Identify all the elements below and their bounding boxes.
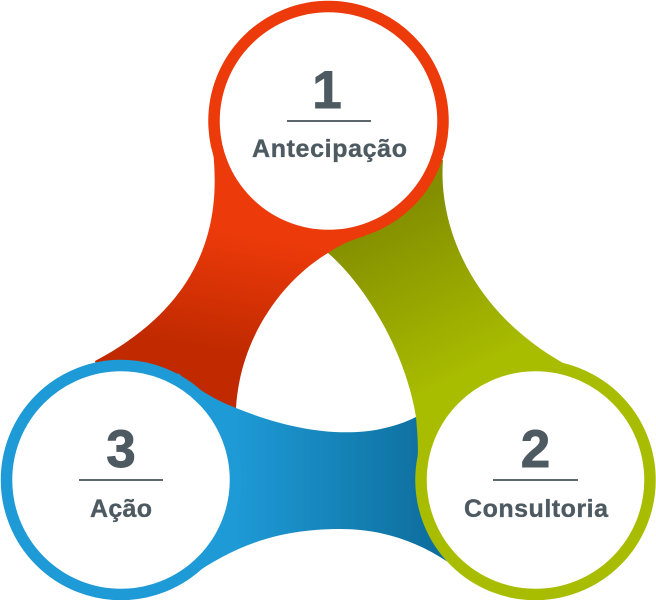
connector: olive band: [328, 120, 563, 480]
connector: red band: [95, 120, 365, 480]
number 3: 3: [106, 420, 136, 479]
node 1: Antecipação: [214, 6, 443, 236]
node 2: Consultoria: [421, 366, 650, 594]
divider 1: [287, 120, 371, 122]
connector: green neck over blue band: [416, 395, 535, 480]
divider 3: [79, 479, 163, 481]
label Antecipação: Antecipação: [252, 135, 407, 163]
number 1: 1: [312, 61, 342, 120]
number 2: 2: [521, 420, 550, 479]
connector: blue band: [121, 373, 535, 577]
divider 2: [493, 479, 578, 481]
label Ação: Ação: [90, 495, 152, 523]
node 3: Ação: [6, 366, 236, 594]
label Consultoria: Consultoria: [464, 495, 609, 523]
